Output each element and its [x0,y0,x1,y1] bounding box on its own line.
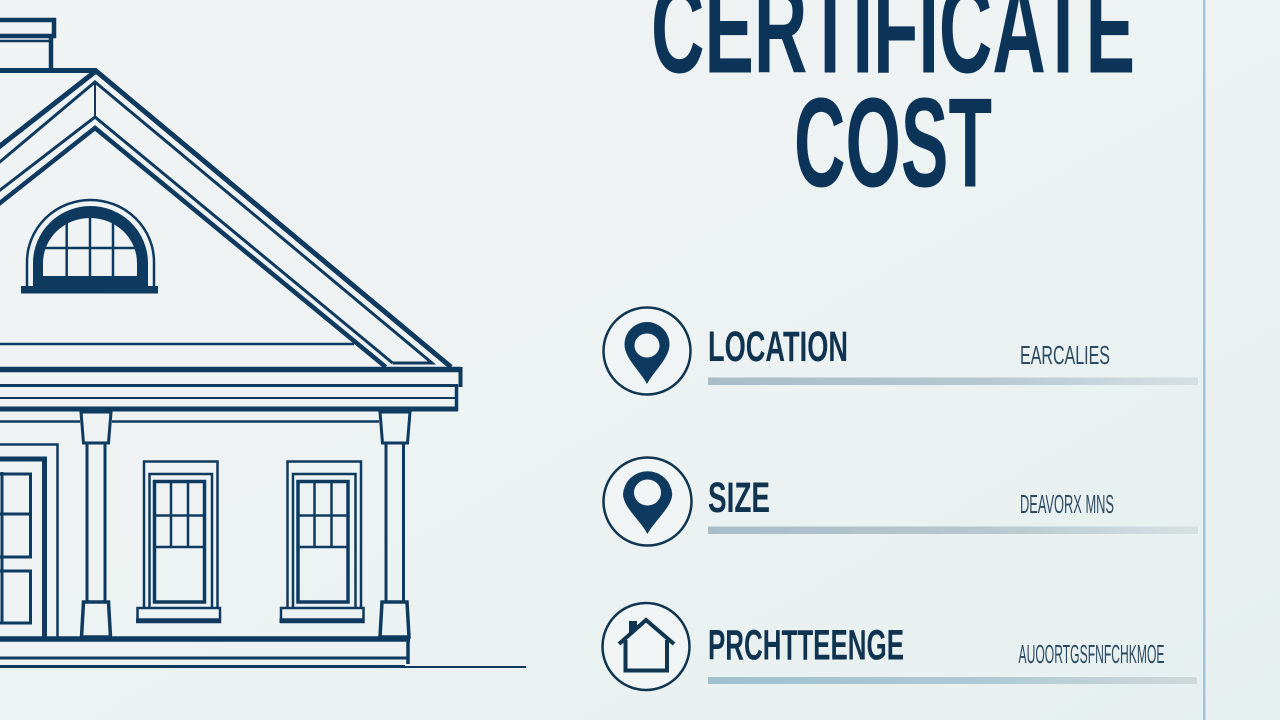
roof [0,70,451,367]
right column [380,412,410,637]
row: size: DEAVORX MNS [1020,489,1114,519]
label: PRCHTTEENGE [708,622,904,670]
arched attic window [21,200,158,294]
title line: cost: COST [794,72,992,214]
house illustration [0,20,526,667]
chimney [0,20,54,70]
value: EARCALIES [1020,340,1110,370]
left column [81,412,111,637]
icon: location pin [604,308,690,394]
bar [708,378,1198,385]
bar [708,526,1198,534]
foundation and ground line [0,636,526,667]
label: SIZE [708,474,770,522]
vertical divider [1203,0,1206,720]
label: LOCATION [708,323,848,371]
door [0,444,58,637]
row: prchtteenge [602,603,1197,690]
bar [708,677,1197,684]
icon: size pin [604,458,692,546]
left window [136,462,221,622]
row: location [604,308,1198,394]
right window [280,462,364,622]
entablature [0,367,461,422]
title [651,0,1135,214]
row: size [604,458,1198,546]
icon: house [602,603,690,690]
